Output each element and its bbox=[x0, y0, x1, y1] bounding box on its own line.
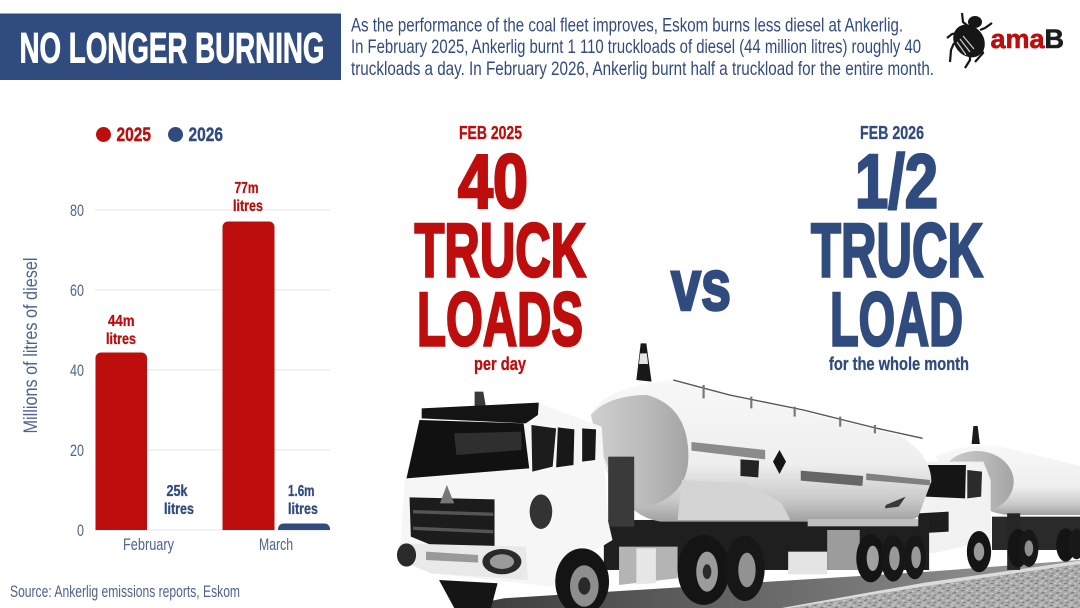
y axis labels: 60 bbox=[70, 281, 84, 300]
wordmark: amaB bbox=[990, 24, 1064, 54]
y axis title: Millions of litres of diesel bbox=[21, 258, 42, 434]
bar label: 77m litres: litres bbox=[233, 198, 263, 215]
panel: Feb 2026 stat bbox=[811, 123, 983, 374]
bar label: 1.6m litres bbox=[288, 483, 318, 518]
y axis labels: 40 bbox=[70, 361, 84, 380]
chart legend bbox=[96, 125, 223, 146]
panel: Feb 2026 stat: 1/2 bbox=[855, 140, 938, 224]
bar label: 1.6m litres: litres bbox=[288, 501, 318, 518]
chart legend: 2026 bbox=[188, 125, 223, 146]
panel: Feb 2026 stat: TRUCK bbox=[811, 208, 983, 294]
vs: vs bbox=[671, 246, 731, 326]
panel: Feb 2025 stat bbox=[414, 123, 586, 374]
x axis labels: February bbox=[123, 535, 174, 554]
bar label: 77m litres: 77m bbox=[234, 180, 258, 197]
main tanker bbox=[591, 343, 931, 574]
panel: Feb 2025 stat: TRUCK bbox=[414, 208, 586, 294]
tractor cab bbox=[397, 392, 678, 608]
source note: Source: Ankerlig emissions reports, Eskom bbox=[10, 583, 240, 601]
y axis labels: 80 bbox=[70, 201, 84, 220]
bar chart bbox=[21, 180, 330, 554]
title banner: NO LONGER BURNING bbox=[20, 26, 324, 72]
icon: dung beetle bbox=[947, 13, 992, 68]
bar label: 1.6m litres: 1.6m bbox=[288, 483, 314, 500]
rear tanker truck bbox=[916, 426, 1080, 572]
title banner bbox=[0, 14, 341, 80]
intro text: As the performance of the coal fleet improves, Eskom burns less diesel at Ankerlig. bbox=[351, 14, 903, 36]
road bbox=[456, 560, 1080, 608]
bar label: 44m litres: 44m bbox=[108, 313, 134, 330]
y axis labels bbox=[70, 201, 84, 540]
logo: amaB with beetle bbox=[947, 13, 1064, 68]
bar: March 2026 bbox=[278, 524, 330, 530]
chart legend: 2025 bbox=[116, 125, 151, 146]
x axis labels: March bbox=[259, 535, 293, 554]
bar label: 77m litres bbox=[233, 180, 263, 215]
y axis labels: 20 bbox=[70, 441, 84, 460]
panel: Feb 2025 stat: FEB 2025 bbox=[459, 123, 522, 143]
intro text: truckloads a day. In February 2026, Ankerlig burnt half a truckload for the entire month. bbox=[351, 58, 934, 80]
bar label: 25k litres: 25k bbox=[166, 483, 188, 500]
panel: Feb 2025 stat: 40 bbox=[458, 140, 528, 224]
intro text: In February 2025, Ankerlig burnt 1 110 truckloads of diesel (44 million litres) roughly 40 bbox=[351, 36, 921, 58]
bar: February 2025 bbox=[96, 352, 147, 530]
panel: Feb 2026 stat: FEB 2026 bbox=[860, 123, 924, 143]
bar label: 44m litres bbox=[106, 313, 136, 348]
illustration: fuel tanker trucks bbox=[397, 343, 1080, 608]
y axis labels: 0 bbox=[77, 521, 84, 540]
x axis labels bbox=[123, 535, 293, 554]
panel: Feb 2026 stat: for the whole month bbox=[829, 354, 969, 374]
bar label: 44m litres: litres bbox=[106, 331, 136, 348]
bar label: 25k litres: litres bbox=[164, 501, 194, 518]
panel: Feb 2025 stat: LOADS bbox=[417, 278, 583, 362]
panel: Feb 2025 stat: per day bbox=[474, 354, 526, 374]
wheels bbox=[555, 534, 926, 608]
bar: March 2025 bbox=[222, 222, 274, 530]
panel: Feb 2026 stat: LOAD bbox=[830, 278, 963, 362]
bar label: 25k litres bbox=[164, 483, 194, 518]
intro text bbox=[351, 14, 934, 80]
